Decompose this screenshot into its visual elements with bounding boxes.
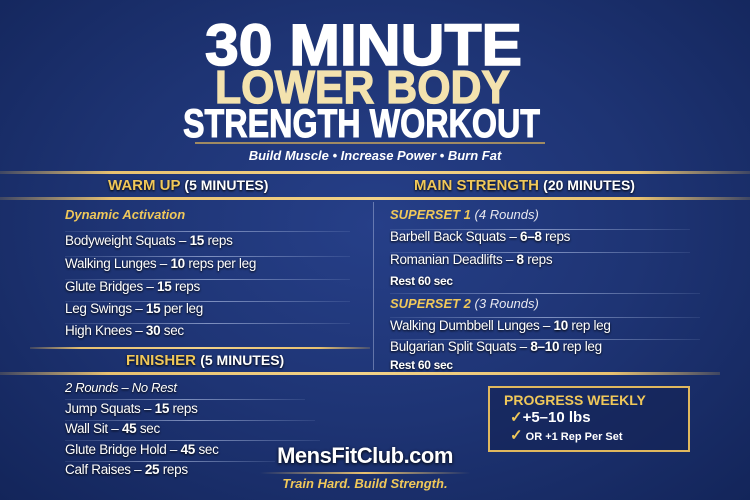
title: LOWER BODY xyxy=(215,61,510,113)
item: Walking Dumbbell Lunges – 10 rep leg xyxy=(390,318,611,333)
item: Glute Bridges – 15 reps xyxy=(65,279,200,294)
item: Romanian Deadlifts – 8 reps xyxy=(390,252,552,267)
sub: superset 1: SUPERSET 1 (4 Rounds) xyxy=(390,207,539,222)
rest: Rest 60 sec xyxy=(390,358,453,372)
item: Jump Squats – 15 reps xyxy=(65,401,198,416)
sub: dynamic activation: Dynamic Activation xyxy=(65,207,185,222)
divider xyxy=(373,202,374,370)
callout: progress weekly xyxy=(488,386,690,452)
title: Build Muscle • Increase Power • Burn Fat xyxy=(249,148,502,163)
item: Walking Lunges – 10 reps per leg xyxy=(65,256,256,271)
heading: finisher: FINISHER (5 MINUTES) xyxy=(126,352,284,369)
sub: 2 Rounds – No Rest xyxy=(65,380,177,395)
brand: Train Hard. Build Strength. xyxy=(282,476,448,491)
item: Calf Raises – 25 reps xyxy=(65,462,188,477)
item: Wall Sit – 45 sec xyxy=(65,421,160,436)
title xyxy=(183,13,545,163)
item: Barbell Back Squats – 6–8 reps xyxy=(390,229,570,244)
callout: progress weekly: ✓+5–10 lbs xyxy=(510,409,591,426)
sub: superset 2: SUPERSET 2 (3 Rounds) xyxy=(390,296,539,311)
panel: warm up xyxy=(64,207,350,340)
rest: Rest 60 sec xyxy=(390,274,453,288)
brand: MensFitClub.com xyxy=(277,443,453,468)
item: High Knees – 30 sec xyxy=(65,323,184,338)
panel: finisher xyxy=(64,380,320,479)
panel: main strength xyxy=(389,207,700,372)
item: Leg Swings – 15 per leg xyxy=(65,301,203,316)
item: Bulgarian Split Squats – 8–10 rep leg xyxy=(390,339,602,354)
callout: progress weekly: PROGRESS WEEKLY xyxy=(504,392,646,408)
callout: progress weekly: ✓ OR +1 Rep Per Set xyxy=(510,427,623,444)
title: STRENGTH WORKOUT xyxy=(183,102,540,146)
item: Glute Bridge Hold – 45 sec xyxy=(65,442,219,457)
item: Bodyweight Squats – 15 reps xyxy=(65,233,233,248)
brand xyxy=(264,443,466,491)
title: 30 MINUTE xyxy=(205,13,522,78)
heading: main strength: MAIN STRENGTH (20 MINUTES) xyxy=(414,177,635,194)
heading: warm up: WARM UP (5 MINUTES) xyxy=(108,177,268,194)
